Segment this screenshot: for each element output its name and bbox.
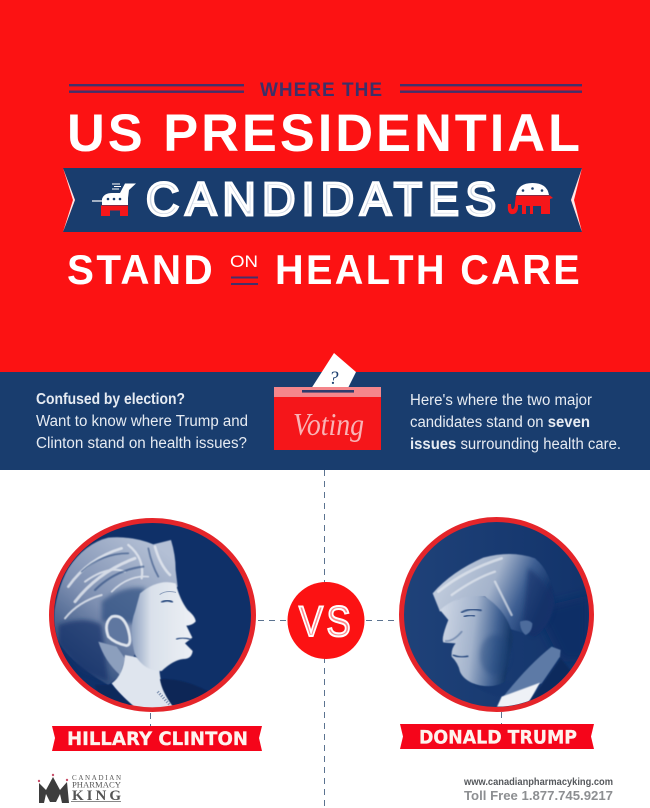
face	[440, 596, 513, 687]
heading: stand on health care: STAND	[67, 246, 215, 293]
banner: candidates	[63, 168, 582, 232]
logo: canadian pharmacy king: CANADIAN	[72, 774, 121, 782]
heading: stand on health care: HEALTH CARE	[275, 246, 582, 293]
collar	[503, 647, 561, 697]
voting script: Voting	[293, 406, 364, 442]
hair	[52, 537, 178, 685]
icon: voting ballot box	[274, 353, 381, 450]
ballot paper: ?	[329, 368, 339, 389]
text block: left intro: Clinton stand on health issues?	[36, 435, 247, 452]
candidates lettering: CANDIDATES	[146, 173, 496, 225]
logo: canadian pharmacy king: KING	[72, 788, 121, 804]
text block: right intro: candidates stand on seven	[410, 414, 590, 431]
on with stripes: ON	[230, 253, 258, 271]
neck shadow	[472, 683, 497, 688]
contact details: www.canadianpharmacyking.com	[463, 776, 613, 788]
vs badge: VS	[299, 598, 354, 646]
neck	[112, 655, 173, 709]
contact details: Toll Free 1.877.745.9217	[464, 788, 613, 803]
text block: left intro: Confused by election?	[36, 391, 185, 408]
ear	[106, 616, 130, 646]
shirt	[497, 683, 540, 708]
portrait: donald trump	[402, 520, 592, 710]
text block: left intro: Want to know where Trump and	[36, 413, 248, 430]
lower hair wisps	[98, 642, 125, 675]
contact details	[463, 776, 613, 803]
logo: canadian pharmacy king: PHARMACY	[72, 780, 121, 790]
facial features	[446, 609, 481, 657]
icon: democratic donkey	[92, 184, 136, 216]
portrait: hillary clinton	[52, 520, 254, 712]
jacket	[528, 659, 570, 701]
icon: crown	[38, 774, 69, 803]
header background	[0, 0, 650, 373]
text block: right intro	[410, 392, 621, 453]
heading: where the: WHERE THE	[260, 80, 382, 101]
icon: republican elephant	[508, 183, 553, 214]
heading: stand on health care	[67, 246, 582, 293]
heading: us presidential: US PRESIDENTIAL	[67, 104, 583, 163]
jacket	[159, 678, 208, 706]
text block: left intro	[36, 391, 248, 452]
name ribbon: hillary clinton: HILLARY CLINTON	[67, 728, 248, 750]
on with stripes	[230, 253, 258, 285]
hair	[433, 554, 554, 637]
vs badge	[288, 582, 364, 659]
logo: canadian pharmacy king	[38, 774, 121, 804]
text block: right intro: Here's where the two major	[410, 392, 592, 409]
face	[132, 582, 196, 671]
text block: right intro: issues surrounding health care.	[410, 436, 621, 453]
ear	[520, 620, 532, 635]
facial features	[160, 592, 191, 640]
intro band	[0, 372, 650, 470]
cheek shading	[478, 635, 501, 674]
name ribbon: donald trump: DONALD TRUMP	[419, 726, 577, 748]
